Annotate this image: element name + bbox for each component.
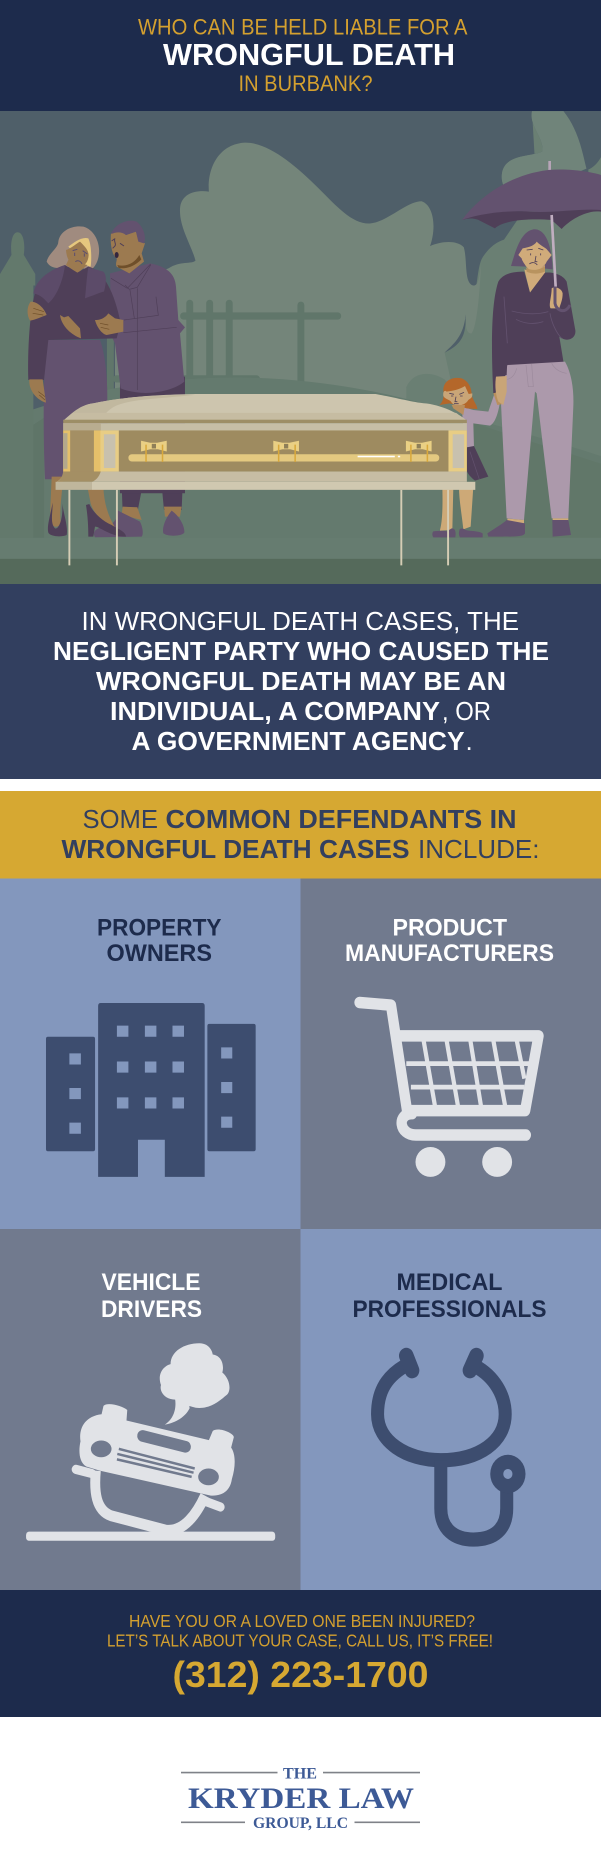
defendants heading: WRONGFUL DEATH CASES [62, 834, 410, 864]
tile: product manufacturers: MANUFACTURERS [345, 940, 554, 967]
coffin end panels [63, 430, 467, 471]
statement panel: INDIVIDUAL, A COMPANY [110, 696, 440, 726]
call to action footer: HAVE YOU OR A LOVED ONE BEEN INJURED? [129, 1611, 475, 1631]
logo: The Kryder Law Group, LLC: GROUP, LLC [253, 1815, 348, 1832]
statement panel: A GOVERNMENT AGENCY [132, 726, 464, 756]
logo: The Kryder Law Group, LLC [181, 1766, 420, 1832]
defendants heading: COMMON DEFENDANTS IN [166, 804, 516, 834]
call to action footer [0, 1590, 601, 1717]
tile: vehicle drivers [0, 1229, 300, 1590]
tile: product manufacturers [300, 878, 601, 1229]
person: older woman legs [48, 477, 126, 537]
ground [0, 378, 601, 584]
icon: overturned car [26, 1343, 275, 1541]
coffin stand legs [69, 490, 448, 565]
tile: medical professionals: PROFESSIONALS [352, 1296, 546, 1323]
defendants heading: INCLUDE: [418, 834, 540, 864]
child and woman lower body [487, 360, 573, 537]
defendants heading [0, 791, 601, 878]
logo: The Kryder Law Group, LLC: THE [283, 1766, 317, 1782]
header banner: WHO CAN BE HELD LIABLE FOR A [138, 14, 468, 40]
header banner: WRONGFUL DEATH [163, 37, 455, 72]
person: older woman [28, 226, 123, 479]
tile: product manufacturers: PRODUCT [392, 914, 507, 942]
call to action footer: LET’S TALK ABOUT YOUR CASE, CALL US, IT’S FREE! [107, 1630, 493, 1650]
header banner: IN BURBANK? [238, 71, 372, 96]
coffin handles [141, 441, 432, 462]
tile: vehicle drivers: VEHICLE [102, 1269, 200, 1296]
icon: shopping cart [360, 1003, 539, 1177]
icon: office buildings [46, 1003, 256, 1177]
tile: vehicle drivers: DRIVERS [101, 1296, 202, 1323]
illustration: funeral scene [0, 111, 601, 584]
defendants heading: SOME [82, 804, 158, 834]
statement panel: WRONGFUL DEATH MAY BE AN [96, 666, 506, 696]
statement panel: IN WRONGFUL DEATH CASES, THE [82, 606, 519, 636]
tile: property owners: PROPERTY [97, 914, 222, 942]
statement panel: , OR [442, 696, 491, 726]
icon: stethoscope [378, 1356, 526, 1540]
statement panel: . [466, 726, 473, 756]
coffin [56, 394, 475, 565]
umbrella [462, 161, 601, 311]
tile: medical professionals: MEDICAL [396, 1269, 502, 1296]
logo: The Kryder Law Group, LLC: KRYDER LAW [188, 1782, 414, 1815]
tile: property owners [0, 878, 300, 1229]
tile: medical professionals [300, 1229, 601, 1590]
header banner [0, 0, 601, 111]
person: child [432, 378, 500, 537]
person: woman with umbrella [492, 229, 575, 393]
tile: property owners: OWNERS [106, 940, 212, 967]
person: man comforting [94, 221, 185, 537]
fence [107, 300, 341, 399]
call to action footer: (312) 223-1700 [172, 1654, 428, 1695]
statement panel [0, 584, 601, 779]
fence post [0, 232, 36, 422]
statement panel: NEGLIGENT PARTY WHO CAUSED THE [53, 636, 549, 666]
background trees [115, 111, 601, 456]
